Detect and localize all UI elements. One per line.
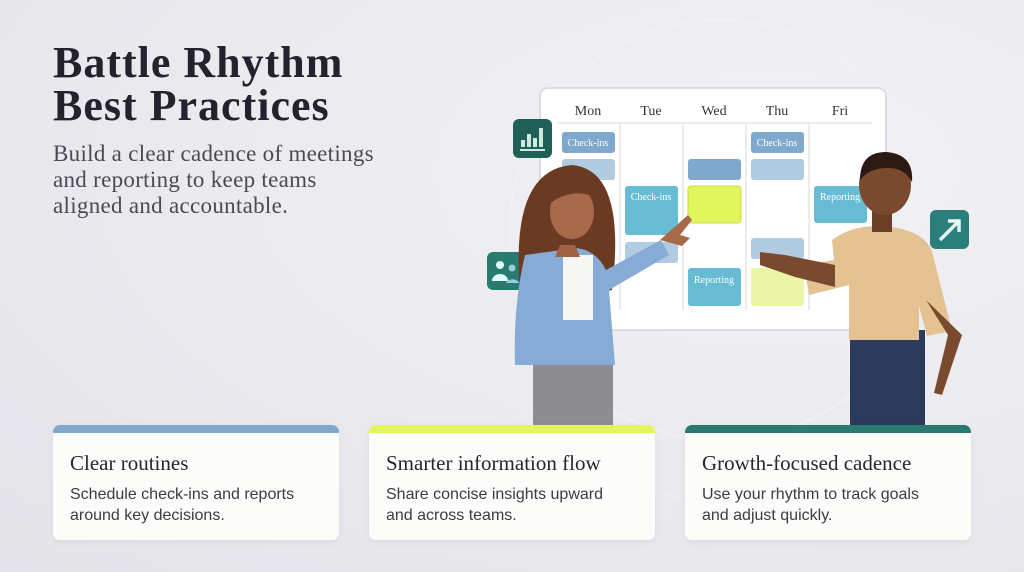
subtitle: and reporting to keep teams xyxy=(53,167,317,192)
card: smarter information flow: Share concise insights upward xyxy=(386,486,603,503)
board: Tue xyxy=(640,104,662,119)
title xyxy=(53,38,343,130)
title: Best Practices xyxy=(53,81,330,130)
card: growth-focused cadence: and adjust quickly. xyxy=(702,507,832,524)
card: growth-focused cadence: Growth-focused cadence xyxy=(702,451,911,475)
board: Reporting xyxy=(694,275,734,286)
subtitle: Build a clear cadence of meetings xyxy=(53,141,374,166)
board: Mon xyxy=(575,104,601,119)
woman presenter xyxy=(515,165,692,425)
card: smarter information flow xyxy=(369,425,655,540)
board: Check-ins xyxy=(568,138,608,149)
card: clear routines: Clear routines xyxy=(70,451,188,475)
card: growth-focused cadence: Use your rhythm to track goals xyxy=(702,486,919,503)
board xyxy=(540,88,886,330)
board: Fri xyxy=(832,104,848,119)
board: Check-ins xyxy=(631,192,671,203)
subtitle: aligned and accountable. xyxy=(53,193,288,218)
board: Reporting xyxy=(820,192,860,203)
icon: people xyxy=(487,252,525,290)
card: clear routines xyxy=(53,425,339,540)
icon: bar chart xyxy=(513,119,552,158)
subtitle xyxy=(53,141,374,218)
board: Check-ins xyxy=(757,138,797,149)
board: Wed xyxy=(701,104,727,119)
card: smarter information flow: and across teams. xyxy=(386,507,517,524)
icon: growth arrow xyxy=(930,210,969,249)
card: clear routines: Schedule check-ins and reports xyxy=(70,486,294,503)
man presenter xyxy=(760,152,962,425)
card: growth-focused cadence xyxy=(685,425,971,540)
card: smarter information flow: Smarter information flow xyxy=(386,451,601,475)
board: Thu xyxy=(766,104,788,119)
title: Battle Rhythm xyxy=(53,38,343,87)
card: clear routines: around key decisions. xyxy=(70,507,225,524)
